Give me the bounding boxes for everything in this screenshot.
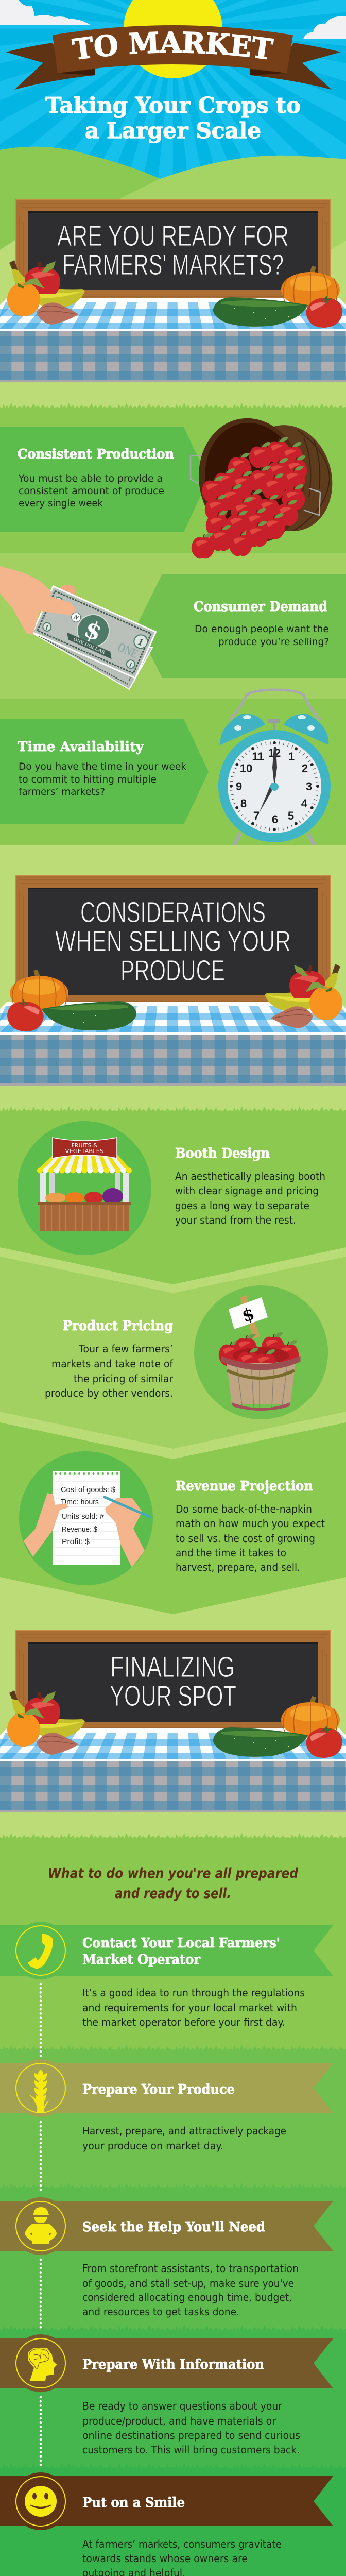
subtitle: Taking Your Crops to — [45, 93, 301, 118]
body text — [82, 2262, 299, 2318]
body text: From storefront assistants, to transportation — [82, 2262, 299, 2275]
body text: towards stands whose owners are — [82, 2552, 248, 2565]
chalk heading: YOUR SPOT — [110, 1680, 236, 1713]
clock numbers: 10 — [240, 762, 252, 775]
clock numbers: 6 — [272, 813, 278, 826]
section 3 background bands — [0, 1833, 346, 2576]
ribbon — [0, 2059, 333, 2117]
subtitle — [45, 93, 301, 143]
body text — [82, 2125, 286, 2152]
panel: consistent production — [0, 427, 209, 532]
body text: with clear signage and pricing — [175, 1184, 319, 1197]
step 5: put on a smile — [0, 2472, 333, 2576]
panel: consumer demand — [136, 574, 346, 678]
icon: smiley — [16, 2477, 65, 2526]
clock numbers: 4 — [301, 797, 308, 810]
chalk heading: FINALIZING — [110, 1651, 235, 1684]
panel: time availability — [0, 719, 209, 824]
icon: apple barrel with price sign — [194, 1285, 328, 1419]
body text: your stand from the rest. — [175, 1214, 296, 1226]
clock numbers: 3 — [306, 780, 312, 793]
body text: customers to. This will bring customers back. — [82, 2444, 300, 2456]
body text — [82, 2400, 300, 2456]
step 1: contact operator — [0, 1922, 333, 2028]
body text — [175, 1170, 325, 1226]
body text: goes a long way to separate — [175, 1199, 309, 1212]
clock numbers: 12 — [268, 747, 281, 759]
hills — [0, 147, 346, 412]
step 3: seek help — [0, 2197, 333, 2318]
body text: to sell vs. the cost of growing — [176, 1532, 315, 1545]
body text: Do some back-of-the-napkin — [176, 1503, 312, 1515]
dotted timeline — [40, 1984, 42, 2469]
handwritten list: Cost of goods: $ — [61, 1485, 116, 1494]
heading: Revenue Projection — [176, 1479, 313, 1494]
body text: math on how much you expect — [176, 1517, 325, 1530]
title banner — [6, 25, 341, 90]
body text: produce/product, and have materials or — [82, 2415, 276, 2427]
chalk heading: CONSIDERATIONS — [80, 896, 266, 929]
body text: farmers’ markets? — [19, 786, 105, 798]
body text: markets and take note of — [51, 1358, 174, 1370]
body text: to commit to hitting multiple — [19, 774, 157, 785]
cloud right — [303, 16, 346, 39]
handwritten list: Revenue: $ — [62, 1525, 98, 1534]
cloud left — [0, 0, 90, 25]
icon: hand holding dollar bills: ONE DOLLAR — [72, 636, 107, 656]
body text: online destinations prepared to send curious — [82, 2429, 300, 2442]
body text: Be ready to answer questions about your — [82, 2400, 283, 2412]
ribbon — [0, 2472, 333, 2530]
chalk heading: PRODUCE — [120, 954, 225, 987]
heading: Prepare With Information — [82, 2357, 264, 2372]
table with gingham cloth 1 — [0, 298, 346, 382]
handwritten list — [61, 1485, 116, 1546]
ribbon — [0, 2197, 333, 2255]
heading: Consistent Production — [18, 447, 174, 462]
ribbon — [0, 1922, 333, 1979]
body text: your produce on market day. — [82, 2140, 223, 2152]
body text: It’s a good idea to run through the regulations — [82, 1987, 305, 1999]
clock numbers: 7 — [253, 809, 260, 822]
heading: Contact Your Local Farmers' — [82, 1936, 280, 1951]
icon: hands writing on paper — [19, 1451, 153, 1585]
intro question: What to do when you're all prepared — [48, 1866, 299, 1882]
clock numbers: 2 — [302, 762, 308, 775]
intro question — [48, 1866, 299, 1902]
body text: and resources to get tasks done. — [82, 2306, 239, 2318]
icon: head with brain — [16, 2338, 65, 2388]
chalk heading — [110, 1651, 236, 1713]
clock numbers: 9 — [236, 780, 242, 793]
body text: the pricing of similar — [74, 1372, 174, 1385]
icon: farmer — [16, 2201, 65, 2251]
body text: of goods, and stall set-up, make sure you've — [82, 2277, 294, 2290]
chalkboard: finalizing your spot — [16, 1630, 330, 1733]
sign text: VEGETABLES — [65, 1148, 104, 1155]
body text: Do enough people want the — [195, 623, 329, 635]
icon: hand holding dollar bills: N — [72, 613, 80, 622]
table with gingham cloth 2 — [0, 1002, 346, 1086]
fruit and vegetables 3 — [7, 1690, 342, 1758]
icon: phone — [16, 1926, 65, 1975]
fruit and vegetables 2 — [7, 964, 342, 1031]
body text — [176, 1503, 325, 1573]
body text: At farmers’ markets, consumers gravitate — [82, 2538, 282, 2550]
fruit and vegetables 1 — [7, 260, 342, 328]
body text — [82, 2538, 282, 2576]
body text — [82, 1987, 305, 2028]
icon: tipped basket of apples — [187, 409, 343, 558]
sun — [124, 0, 222, 78]
section 1 background — [0, 403, 346, 845]
body text — [18, 473, 164, 509]
table with gingham cloth 3 — [0, 1728, 346, 1812]
body text: and the time it takes to — [176, 1547, 286, 1559]
clock numbers: 5 — [288, 809, 294, 822]
icon: apple barrel with price sign: $ — [239, 1303, 257, 1326]
chalk heading — [57, 219, 289, 281]
icon: wheat — [16, 2063, 65, 2113]
body text: the market operator before your first day. — [82, 2016, 285, 2028]
clock numbers: 8 — [240, 797, 247, 810]
panel: booth design — [18, 1121, 325, 1255]
step 4: prepare with information — [0, 2334, 333, 2456]
icon: alarm clock — [218, 690, 331, 851]
icon: hand holding dollar bills: $ — [80, 615, 107, 647]
icon: hand holding dollar bills: ONE — [115, 640, 140, 662]
heading: Product Pricing — [63, 1318, 173, 1334]
body text — [45, 1343, 174, 1399]
section 2 background — [0, 845, 346, 1855]
handwritten list: Units sold: # — [62, 1512, 105, 1521]
body text: You must be able to provide a — [18, 473, 163, 484]
handwritten list: Profit: $ — [62, 1537, 90, 1546]
body text: and requirements for your local market with — [82, 2002, 297, 2014]
body text: considered allocating enough time, budget, — [82, 2291, 292, 2303]
body text: every single week — [19, 498, 103, 509]
subtitle: a Larger Scale — [85, 118, 261, 143]
heading: Seek the Help You'll Need — [82, 2219, 265, 2235]
body text: Tour a few farmers’ — [78, 1343, 173, 1355]
step 2: prepare produce — [0, 2059, 333, 2152]
sky background with sun rays — [0, 0, 346, 185]
body text: Do you have the time in your week — [19, 761, 186, 772]
body text: produce you’re selling? — [218, 636, 329, 648]
intro question: and ready to sell. — [115, 1886, 231, 1902]
heading: Booth Design — [175, 1146, 270, 1161]
body text: harvest, prepare, and sell. — [176, 1561, 300, 1573]
body text: Harvest, prepare, and attractively package — [82, 2125, 286, 2137]
heading: Time Availability — [18, 739, 144, 755]
body text — [19, 761, 186, 798]
panel: revenue projection — [19, 1451, 325, 1585]
icon: hand holding dollar bills: 1 — [44, 623, 50, 631]
title text: TO MARKET — [71, 31, 274, 60]
body text: An aesthetically pleasing booth — [175, 1170, 325, 1182]
icon: market booth — [18, 1121, 151, 1255]
heading: Consumer Demand — [194, 599, 327, 615]
icon: hand holding dollar bills: 1 — [136, 636, 145, 648]
clock numbers: 1 — [288, 750, 295, 763]
body text: consistent amount of produce — [19, 485, 164, 497]
ribbon — [0, 2334, 333, 2392]
heading: Put on a Smile — [82, 2495, 185, 2511]
heading: Prepare Your Produce — [82, 2082, 235, 2097]
icon: hand holding dollar bills: 1 — [128, 660, 134, 669]
icon: hand holding dollar bills — [0, 566, 156, 689]
clock numbers — [236, 747, 312, 826]
chalkboard: are you ready — [16, 199, 330, 302]
chalk heading — [55, 896, 291, 987]
handwritten list: Time: hours — [61, 1498, 99, 1506]
heading: Market Operator — [82, 1952, 200, 1968]
icon: hand holding dollar bills: 1 — [55, 598, 61, 606]
heading — [82, 1936, 280, 1968]
panel: product pricing — [45, 1285, 328, 1419]
sign text — [65, 1142, 104, 1155]
chalkboard: considerations — [16, 875, 330, 1007]
body text: produce by other vendors. — [45, 1387, 173, 1399]
sign text: FRUITS & — [71, 1142, 98, 1149]
body text — [195, 623, 329, 648]
clock numbers: 11 — [252, 750, 264, 763]
